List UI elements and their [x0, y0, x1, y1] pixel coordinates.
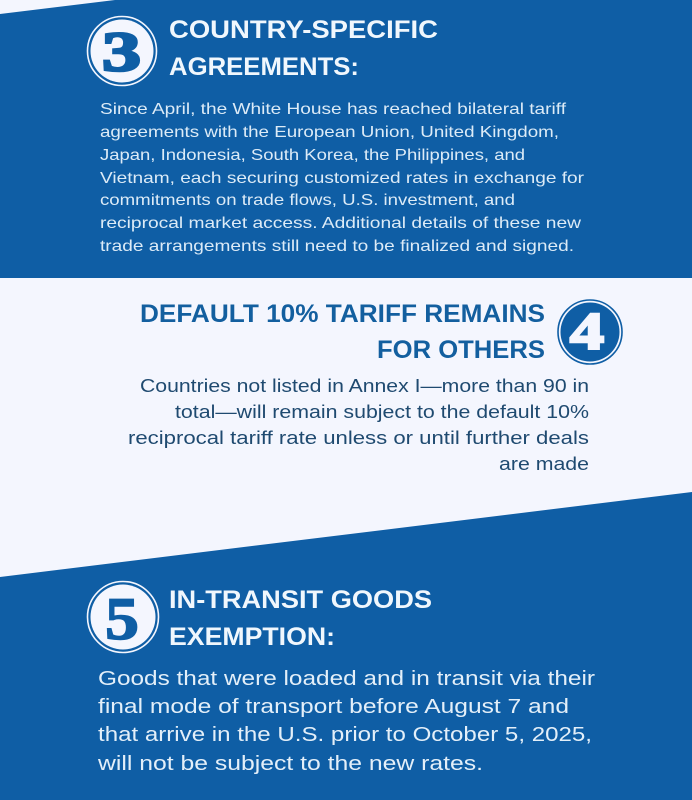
heading: default tariff remains: DEFAULT 10% TARIFF REMAINS [140, 300, 545, 328]
panel: default 10% tariff [0, 278, 692, 578]
text block: exemption description: Goods that were loaded and in transit via their [98, 668, 595, 690]
text block: agreements description: Since April, the White House has reached bilateral tariff [100, 101, 567, 118]
heading: country-specific agreements: COUNTRY-SPECIFIC [169, 16, 438, 44]
text block: default tariff description [128, 376, 589, 474]
icon: number 4 badge: 4 [570, 303, 604, 361]
text block: default tariff description: Countries not listed in Annex I—more than 90 in [140, 376, 589, 396]
text block: agreements description: trade arrangements still need to be finalized and signed. [100, 238, 574, 255]
text block: agreements description: commitments on trade flows, U.S. investment, and [100, 192, 515, 209]
icon: number 3 badge [88, 16, 156, 86]
text block: exemption description [97, 668, 595, 775]
heading: country-specific agreements: AGREEMENTS: [169, 53, 359, 81]
panel: in-transit goods exemption [0, 492, 692, 800]
text block: agreements description: reciprocal market access. Additional details of these new [100, 215, 582, 232]
text block: exemption description: will not be subject to the new rates. [97, 753, 483, 775]
text block: agreements description: Japan, Indonesia, South Korea, the Philippines, and [100, 147, 525, 164]
icon: number 4 badge [558, 300, 622, 364]
icon: number 3 badge: 3 [102, 22, 141, 84]
icon: number 5 badge: 5 [105, 586, 139, 652]
heading: in-transit goods exemption [169, 586, 432, 651]
text block: agreements description: agreements with the European Union, United Kingdom, [100, 124, 559, 141]
icon: number 5 badge [88, 582, 158, 652]
text block: default tariff description: are made [499, 454, 589, 474]
text block: exemption description: that arrive in the U.S. prior to October 5, 2025, [98, 724, 592, 746]
text block: default tariff description: total—will remain subject to the default 10% [175, 402, 589, 422]
text block: exemption description: final mode of transport before August 7 and [98, 696, 569, 718]
heading: country-specific agreements [169, 16, 438, 81]
heading: default tariff remains [140, 300, 545, 364]
text block: default tariff description: reciprocal tariff rate unless or until further deals [128, 428, 589, 448]
heading: default tariff remains: FOR OTHERS [377, 336, 545, 364]
panel: country-specific agreements [0, 0, 692, 278]
heading: in-transit goods exemption: IN-TRANSIT GOODS [169, 586, 432, 614]
text block: agreements description [100, 101, 585, 255]
heading: in-transit goods exemption: EXEMPTION: [169, 623, 335, 651]
text block: agreements description: Vietnam, each securing customized rates in exchange for [100, 170, 585, 187]
